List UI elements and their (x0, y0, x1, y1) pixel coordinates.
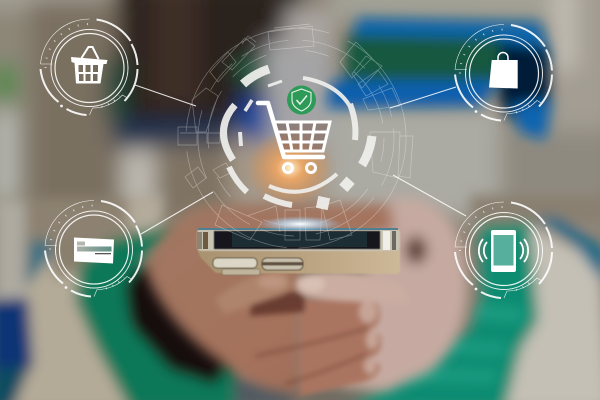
central glow (246, 130, 334, 206)
bag glyph (489, 52, 518, 88)
icon panel: shopping bag (455, 24, 552, 121)
phone (197, 228, 400, 275)
smartphone glyph (479, 230, 528, 272)
central hologram faint ring (178, 24, 413, 248)
icon: shopping cart (258, 103, 330, 172)
hands holding the phone (146, 198, 467, 396)
phone camera lenses (213, 258, 303, 275)
phone screen band (214, 231, 380, 249)
icon: green security shield (287, 86, 316, 114)
phone top light (258, 216, 342, 232)
basket glyph (71, 47, 108, 84)
icon panel: credit card (45, 200, 142, 296)
connector lines (135, 85, 466, 234)
icon panel: smartphone (455, 202, 552, 298)
card glyph (74, 238, 114, 264)
central ring segments (223, 69, 372, 210)
icon panel: shopping basket (40, 19, 138, 115)
phone body (197, 249, 400, 274)
phone edge (197, 229, 400, 251)
